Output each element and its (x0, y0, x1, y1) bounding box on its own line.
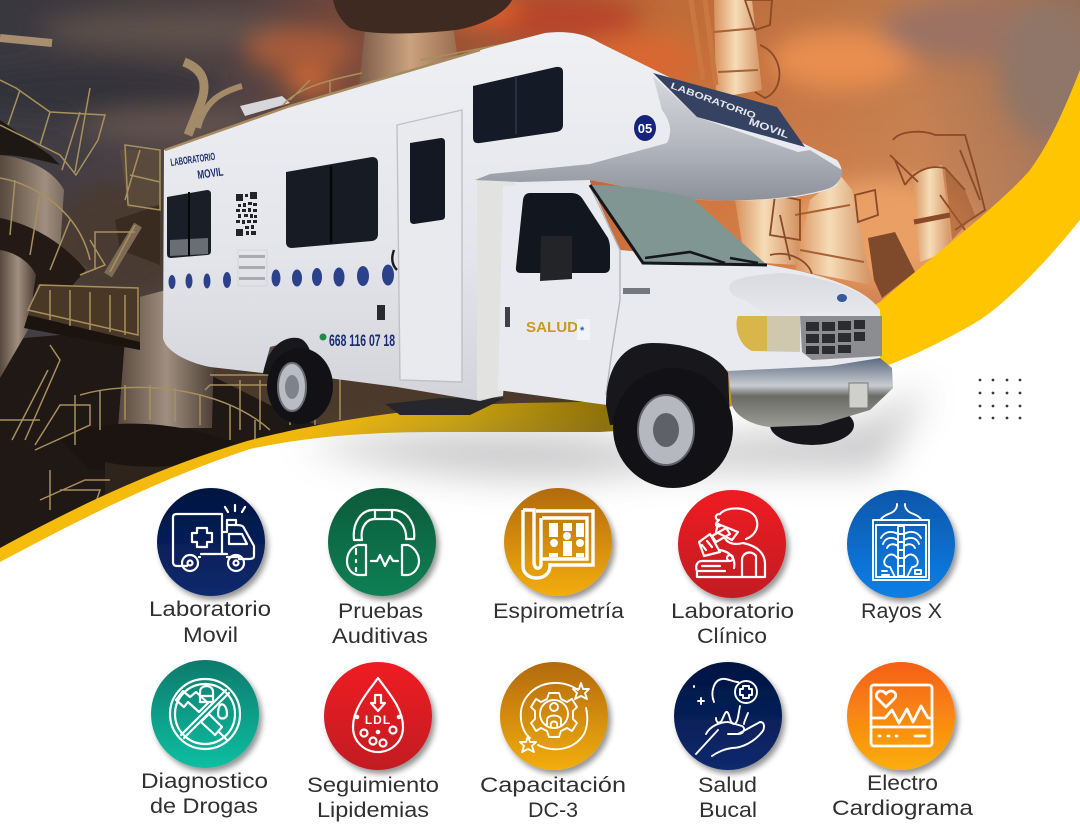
exhaust pipes (0, 38, 52, 43)
Salud logo: * (580, 325, 585, 337)
rear wheel arch (263, 338, 314, 378)
mobile laboratory truck (163, 32, 893, 488)
roof items (240, 96, 290, 116)
side service dots (168, 264, 394, 289)
label: DC-3 (528, 799, 578, 822)
side text LABORATORIO MOVIL: MOVIL (196, 164, 224, 182)
right tower main (714, 0, 762, 98)
label: Seguimiento (307, 774, 439, 797)
unit number badge (634, 115, 656, 141)
decorative dot grid (979, 379, 1021, 419)
label (480, 774, 626, 822)
label: Laboratorio (149, 598, 271, 621)
label: Bucal (699, 799, 757, 822)
service icon 2: hearing tests (328, 488, 436, 596)
side vent (239, 255, 265, 280)
right towers below cab (735, 190, 800, 265)
side text LABORATORIO MOVIL: LABORATORIO (170, 151, 216, 169)
camper door (397, 110, 462, 382)
Salud logo: SALUD (526, 319, 578, 336)
service icon 7: lipid monitoring (324, 662, 432, 770)
rear wheel (267, 348, 333, 424)
label: Clínico (697, 625, 767, 648)
cab side window (516, 193, 610, 273)
camper box and cab-over silhouette (163, 32, 842, 401)
label: Pruebas (338, 600, 423, 623)
central tank (118, 285, 215, 428)
label: Cardiograma (832, 797, 973, 820)
top centre tower (359, 30, 458, 84)
service icon 9: oral health (674, 662, 782, 770)
headlight (737, 316, 800, 352)
label: Auditivas (332, 625, 428, 648)
catwalk deck (28, 284, 140, 342)
rear tyre behind front (770, 405, 854, 445)
label: Electro (867, 772, 938, 795)
service icon 10: electrocardiogram (847, 662, 955, 770)
label: Movil (183, 624, 238, 647)
lattice behind truck (213, 354, 585, 425)
cab-over sign panel (653, 73, 805, 147)
wipers (645, 252, 758, 263)
label (141, 770, 268, 818)
label (832, 772, 973, 820)
unit number badge: 05 (638, 121, 652, 136)
Salud logo (526, 319, 590, 340)
label (671, 600, 794, 648)
far right tower (912, 165, 952, 262)
phone number: 668 116 07 18 (329, 331, 395, 350)
left saucer top (0, 120, 60, 165)
label (149, 598, 271, 647)
licence plate (849, 383, 868, 408)
label: Rayos X (861, 600, 942, 623)
service icon 4: clinical laboratory (678, 490, 786, 598)
camper windows (473, 67, 563, 143)
cab-over underside (475, 76, 842, 200)
sunset clouds (0, 0, 1080, 300)
label: Lipidemias (317, 799, 429, 822)
background photo: refinery at sunset (0, 0, 1080, 575)
label: de Drogas (150, 795, 258, 818)
cab-over sign panel: MOVIL (747, 116, 790, 141)
label (332, 600, 428, 648)
hood (729, 273, 880, 318)
step (385, 398, 505, 415)
catwalks and railings left (0, 80, 105, 175)
service icon 3: spirometry (504, 488, 612, 596)
mirror (540, 236, 572, 281)
door badge (623, 288, 650, 294)
service icon 6: drug diagnosis (151, 660, 259, 768)
yellow swoosh (0, 70, 1080, 565)
label: Salud (698, 774, 757, 797)
LDL icon text: LDL (365, 713, 391, 727)
truck ground shadow (300, 385, 930, 478)
QR code (236, 192, 257, 236)
service icon 1: ambulance (157, 488, 265, 596)
side text LABORATORIO MOVIL (170, 151, 224, 182)
label: Espirometría (493, 600, 624, 623)
phone number (320, 331, 395, 350)
wheel arch (606, 343, 730, 425)
front bumper (728, 358, 893, 427)
label: Laboratorio (671, 600, 794, 623)
cab body (498, 182, 880, 405)
white lower panel (0, 220, 1080, 834)
roof edge dirt (165, 50, 480, 150)
label (698, 774, 757, 822)
windshield (590, 185, 767, 265)
label: Capacitación (480, 774, 626, 797)
left refinery dark base (0, 332, 320, 548)
grille (800, 316, 882, 360)
door handle (505, 307, 510, 327)
cab-over sign panel: LABORATORIO (669, 80, 757, 121)
service icon 5: x-ray (847, 490, 955, 598)
left tank upper (0, 155, 87, 272)
left tank lower (0, 250, 36, 378)
service icon 8: DC-3 training (500, 662, 608, 770)
label (307, 774, 439, 822)
front wheel (613, 368, 733, 488)
cab recess (477, 180, 515, 400)
label: Diagnostico (141, 770, 268, 793)
